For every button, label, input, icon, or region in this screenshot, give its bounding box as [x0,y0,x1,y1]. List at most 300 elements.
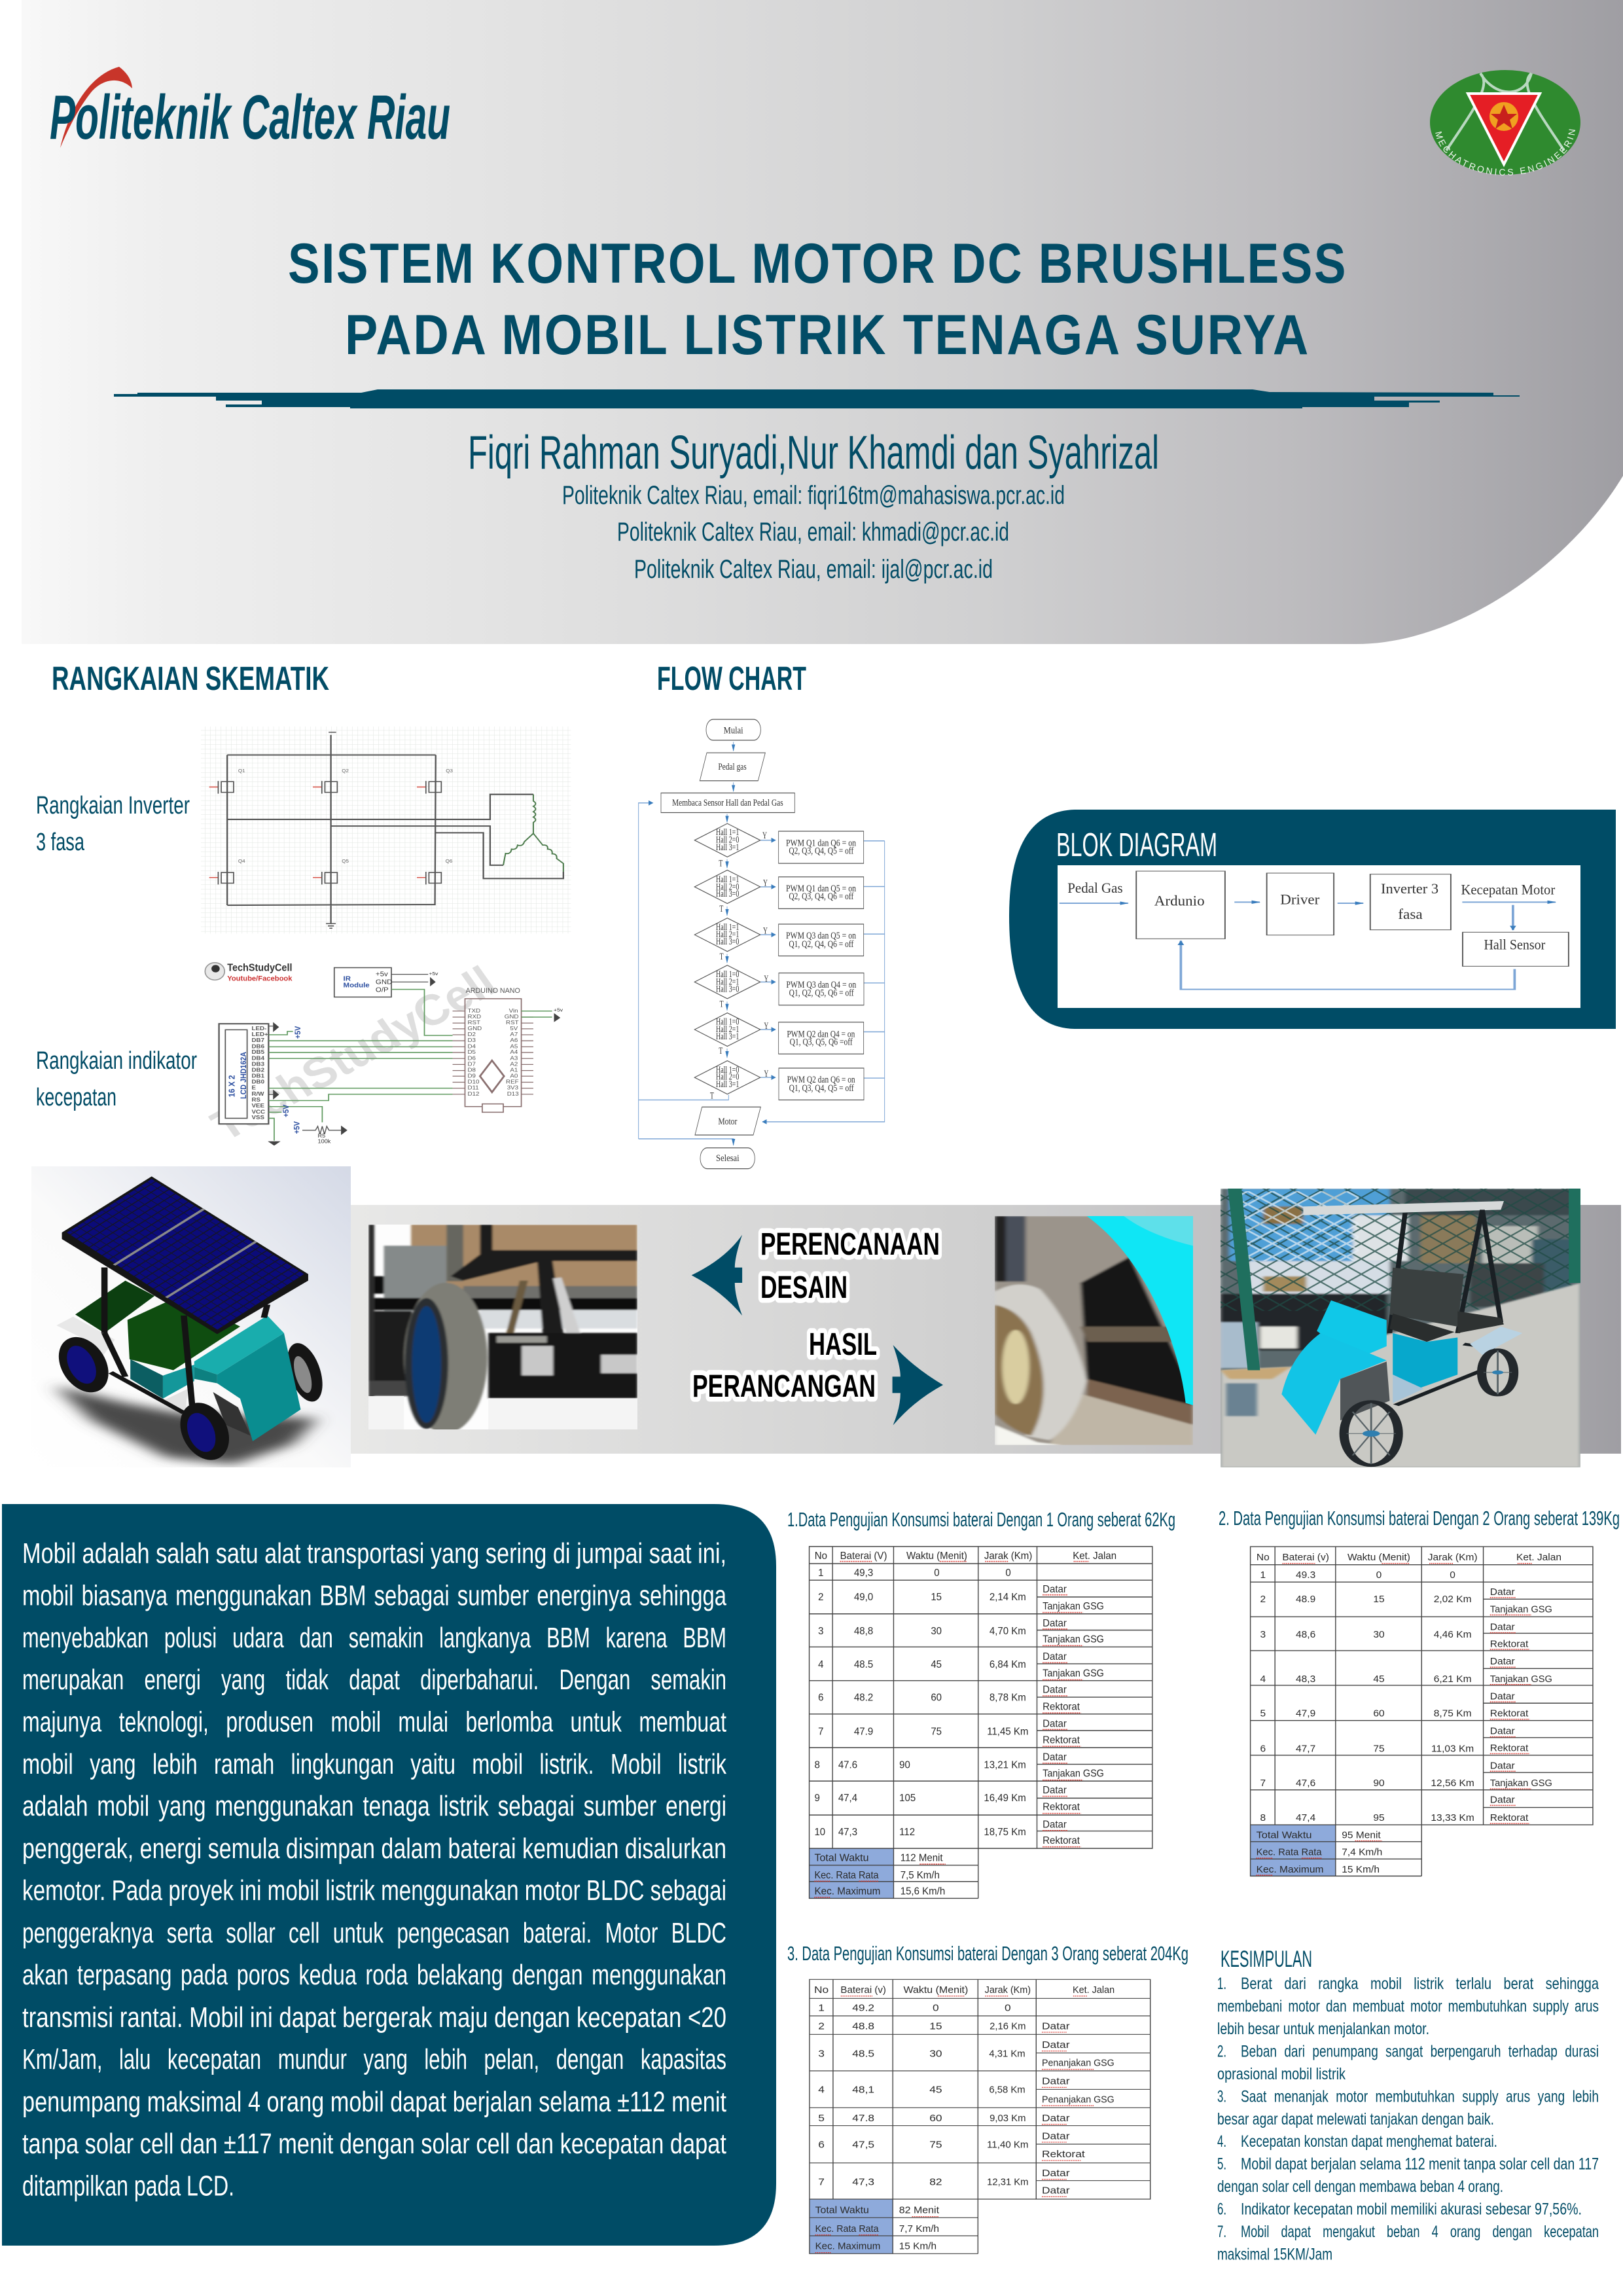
chart: speed indicator schematic: +5V [293,1121,302,1134]
author affiliations: Politeknik Caltex Riau, email: khmadi@pcr.ac.id [617,518,1009,547]
branch labels: T [719,1045,723,1056]
chart: speed indicator schematic: 5V [510,1025,518,1031]
label: rangkaian indikator kecepatan: kecepatan [36,1084,116,1111]
chart: speed indicator schematic: D4 [468,1043,476,1049]
table 3: 3 person battery test: 15 [929,2021,942,2032]
chart: inverter 3 phase schematic: Q2 [342,768,349,774]
decisions: Hall 2=0 [716,834,739,845]
table 1: 1 person battery test: 47,3 [838,1827,857,1838]
text: introduction paragraph: adalah mobil yang menggunakan tenaga listrik sebagai sumber energi [22,1790,726,1822]
table 1: 1 person battery test: Datar [1043,1618,1067,1629]
text: conclusions list: 6. [1217,2200,1226,2219]
PWM process boxes: PWM Q1 dan Q5 = on [786,883,856,893]
table 1: 1 person battery test: Datar [1043,1684,1067,1696]
table 3: 3 person battery test: 15 Km/h [899,2241,936,2251]
branch labels: T [720,951,724,961]
heading: blok diagram: BLOK DIAGRAM [1056,826,1217,863]
authors: Fiqri Rahman Suryadi,Nur Khamdi dan Syahrizal [468,427,1159,479]
author affiliations [562,481,1065,584]
text: conclusions list: besar agar dapat melewati tanjakan dengan baik. [1217,2110,1494,2128]
table 1: 1 person battery test: 112 Menit [901,1853,943,1864]
table 1: 1 person battery test: Kec. Rata Rata [814,1870,879,1881]
table 3: 3 person battery test: 45 [929,2085,942,2095]
chart: speed indicator schematic [202,957,563,1150]
table 1: 1 person battery test: 3 [818,1626,824,1637]
table 2: 2 person battery test: Kec. Rata Rata [1257,1847,1322,1857]
table 2: 2 person battery test: 12,56 Km [1431,1778,1474,1789]
branch labels: Y [763,925,768,936]
table 3: 3 person battery test: Baterai (v) [840,1984,886,1996]
decisions: Hall 3=0 [716,984,739,994]
table 2: 2 person battery test: 4,46 Km [1434,1629,1472,1640]
table 1: 1 person battery test: 112 [899,1827,915,1838]
table 3: 3 person battery test: 48,1 [852,2085,874,2095]
table 2: 2 person battery test: Baterai (v) [1282,1552,1329,1563]
table 1: 1 person battery test: 30 [931,1626,942,1637]
chart: speed indicator schematic: DB5 [252,1049,264,1055]
chart: speed indicator schematic: +5v [429,971,438,977]
table 1: 1 person battery test: 48,8 [854,1626,873,1637]
PWM process boxes: Q2, Q3, Q4, Q5 = off [789,846,854,856]
label: hasil perancangan: HASIL [809,1327,877,1362]
table 1: 1 person battery test: 47,4 [838,1793,858,1804]
chart: speed indicator schematic: DB3 [252,1061,264,1067]
table 3: 3 person battery test: Kec. Maximum [815,2241,880,2251]
table 2: 2 person battery test [1251,1547,1593,1876]
chart: speed indicator schematic: TechStudyCell [227,962,292,973]
decisions: Hall 2=1 [716,976,739,987]
table 3: 3 person battery test: 47,5 [852,2140,874,2150]
table 2: 2 person battery test: Rektorat [1490,1639,1529,1649]
table 2: 2 person battery test: 7,4 Km/h [1342,1847,1382,1857]
PWM process boxes: PWM Q3 dan Q5 = on [786,930,856,941]
text: conclusions list: 7. [1217,2223,1226,2241]
heading: table 1: 1.Data Pengujian Konsumsi baterai Dengan 1 Orang seberat 62Kg [787,1508,1175,1531]
table 1: 1 person battery test: 49,3 [854,1568,873,1579]
table 3: 3 person battery test: 48.5 [852,2049,874,2059]
input: pedal gas [700,753,765,781]
decisions: Hall 2=1 [716,1024,739,1034]
table 3: 3 person battery test: Datar [1042,2076,1070,2087]
table 1: 1 person battery test: Rektorat [1043,1835,1080,1846]
table 2: 2 person battery test: Tanjakan GSG [1490,1778,1552,1789]
table 3: 3 person battery test: Waktu (Menit) [903,1984,968,1996]
table 3: 3 person battery test: Datar [1042,2131,1070,2142]
table 3: 3 person battery test: Jarak (Km) [985,1984,1031,1996]
chart: speed indicator schematic: A0 [510,1073,518,1079]
table 1: 1 person battery test: Datar [1043,1584,1067,1595]
table 2: 2 person battery test: Rektorat [1490,1812,1529,1823]
branch labels [710,830,768,1101]
table 3: 3 person battery test: 47,3 [852,2177,874,2187]
branch labels: T [720,999,724,1009]
decisions: Hall 3=1 [716,842,739,852]
table 2: 2 person battery test: 48.9 [1296,1594,1315,1605]
table 3: 3 person battery test: 1 [818,2003,825,2013]
text: introduction paragraph: akan terpasang pada poros kedua roda belakang dengan menggunakan [22,1959,726,1991]
table 2: 2 person battery test: 95 Menit [1342,1830,1381,1841]
table 1: 1 person battery test: 4 [818,1659,824,1670]
table 2: 2 person battery test: 0 [1450,1570,1455,1581]
table 3: 3 person battery test: Datar [1042,2039,1070,2051]
chart: inverter 3 phase schematic: Q1 [238,768,245,774]
table 2: 2 person battery test: 7 [1260,1778,1266,1789]
table 1: 1 person battery test: Rektorat [1043,1701,1080,1712]
table 3: 3 person battery test: 6,58 Km [989,2085,1026,2095]
table 1: 1 person battery test: Tanjakan GSG [1043,1768,1104,1780]
table 1: 1 person battery test: 6,84 Km [990,1659,1026,1670]
PWM process boxes: PWM Q3 dan Q4 = on [786,979,856,990]
author affiliations: Politeknik Caltex Riau, email: fiqri16tm@mahasiswa.pcr.ac.id [562,481,1065,510]
table 3: 3 person battery test: Datar [1042,2113,1070,2124]
table 2: 2 person battery test: 45 [1373,1674,1385,1685]
table 2: 2 person battery test: Tanjakan GSG [1490,1604,1552,1615]
table 1: 1 person battery test: 49,0 [854,1592,873,1603]
table 2: 2 person battery test: 6 [1260,1744,1266,1755]
label: rangkaian inverter: 3 fasa [36,829,85,856]
start terminal: Mulai [724,725,743,736]
table 3: 3 person battery test: 82 [929,2177,942,2187]
table 1: 1 person battery test: 47.6 [838,1759,857,1770]
decisions: Hall 2=0 [716,1071,739,1082]
chart: speed indicator schematic: LCD JHD162A [240,1052,248,1099]
chart: inverter 3 phase schematic: Q6 [446,859,452,864]
branch labels: T [719,858,723,869]
chart: speed indicator schematic: A7 [510,1031,518,1037]
text: introduction paragraph: penggerak, energi semula disimpan dalam baterai kemudian disalurkan [22,1833,726,1865]
chart: speed indicator schematic: D9 [468,1073,476,1079]
title divider bar [114,389,1520,408]
chart: block diagram [1060,871,1569,990]
table 3: 3 person battery test: Penanjakan GSG [1042,2058,1115,2068]
chart: speed indicator schematic: VEE [252,1103,264,1109]
table 3: 3 person battery test: Datar [1042,2185,1070,2196]
table 3: 3 person battery test: Rektorat [1042,2149,1085,2160]
table 3: 3 person battery test: 7 [818,2177,825,2187]
table 3: 3 person battery test: 3 [818,2049,825,2059]
table 1: 1 person battery test: 0 [1005,1568,1011,1579]
chart: block diagram: Inverter 3 [1381,881,1438,897]
branch labels: Y [763,878,768,888]
text: introduction paragraph: majunya teknologi, produsen mobil mulai berlomba untuk membuat [22,1706,726,1738]
table 2: 2 person battery test: 1 [1260,1570,1266,1581]
table 1: 1 person battery test: Datar [1043,1785,1067,1796]
PWM process boxes: PWM Q2 dan Q4 = on [787,1028,855,1039]
table 1: 1 person battery test: Tanjakan GSG [1043,1634,1104,1645]
decisions [694,823,760,1094]
end terminal [700,1148,755,1169]
table 1: 1 person battery test: 4,70 Km [990,1626,1026,1637]
chart: block diagram: Hall Sensor [1484,937,1545,953]
table 3: 3 person battery test: 6 [818,2140,825,2150]
chart: speed indicator schematic: IR [344,975,351,982]
table 3: 3 person battery test: Datar [1042,2021,1070,2032]
table 3: 3 person battery test: Kec. Rata Rata [815,2223,879,2234]
table 2: 2 person battery test: 2,02 Km [1434,1594,1472,1605]
PWM process boxes: Q1, Q3, Q5, Q6 =off [790,1037,853,1047]
table 3: 3 person battery test: 60 [929,2113,942,2124]
label: perencanaan desain: DESAIN [760,1270,847,1305]
table 3: 3 person battery test: 0 [1005,2003,1011,2013]
logo: Politeknik Caltex Riau: Politeknik Caltex Riau [50,82,450,152]
text: introduction paragraph: transmisi rantai. Mobil ini dapat bergerak maju dengan kecepatan <20 [22,2001,726,2034]
header background panel [22,0,1623,644]
chart: speed indicator schematic: RST [506,1020,519,1026]
chart: speed indicator schematic: +5V [294,1026,302,1039]
decisions: Hall 1=0 [716,1016,739,1027]
table 1: 1 person battery test: 90 [899,1759,910,1770]
chart: speed indicator schematic: A3 [510,1055,518,1061]
text: conclusions list: lebih besar untuk menjalankan motor. [1217,2020,1429,2038]
table 2: 2 person battery test: 75 [1373,1744,1385,1755]
table 3: 3 person battery test: Ket. Jalan [1073,1984,1115,1996]
decisions: Hall 3=0 [716,936,739,946]
table 2: 2 person battery test: 90 [1373,1778,1385,1789]
chart: speed indicator schematic: DB4 [252,1055,265,1061]
table 2: 2 person battery test: Kec. Maximum [1257,1864,1323,1875]
table 3: 3 person battery test: Total Waktu [815,2205,869,2215]
table 2: 2 person battery test: 47,4 [1296,1812,1316,1823]
decisions: Hall 1=0 [716,1064,739,1075]
table 2: 2 person battery test: Ket. Jalan [1516,1552,1561,1563]
table 2: 2 person battery test: 49.3 [1296,1570,1315,1581]
table 2: 2 person battery test: 95 [1373,1812,1385,1823]
heading: rangkaian skematik: RANGKAIAN SKEMATIK [52,660,329,697]
panel: blok diagram [1009,810,1616,1029]
PWM process boxes [779,831,864,1100]
chart: flow chart [639,719,885,1169]
branch labels: T [719,903,724,914]
table 1: 1 person battery test: Datar [1043,1819,1067,1830]
chart: speed indicator schematic: E [252,1085,256,1091]
text: introduction paragraph: mobil yang lebih ramah lingkungan yaitu mobil listrik. Mobil listrik [22,1748,727,1780]
chart: speed indicator schematic: 16 X 2 [227,1075,237,1097]
chart: speed indicator schematic: LED- [252,1025,266,1031]
table 2: 2 person battery test: Tanjakan GSG [1490,1674,1552,1685]
table 1: 1 person battery test: 48.5 [854,1659,873,1670]
table 1: 1 person battery test: 47.9 [854,1726,873,1738]
text: introduction paragraph: penumpang maksimal 4 orang mobil dapat berjalan selama ±112 menit [22,2086,726,2118]
decisions: Hall 1=1 [716,827,739,837]
text: conclusions list: 2. [1217,2042,1226,2060]
table 1: 1 person battery test: 15,6 Km/h [901,1886,945,1897]
table 2: 2 person battery test: 13,33 Km [1431,1812,1474,1823]
image: chassis rear wheel photo [368,1225,637,1429]
label: perencanaan desain: PERENCANAAN [760,1227,940,1262]
chart: speed indicator schematic: DB0 [252,1079,264,1085]
label: rangkaian indikator kecepatan: Rangkaian indikator [36,1047,197,1075]
image: CAD model of solar car [31,1166,351,1467]
icon: mechatronics engineering emblem [1430,70,1580,175]
text: conclusions list: oprasional mobil listrik [1217,2065,1346,2083]
table 2: 2 person battery test: 47,6 [1296,1778,1315,1789]
table 1: 1 person battery test: 0 [934,1568,940,1579]
process: baca sensor: Membaca Sensor Hall dan Pedal Gas [672,797,783,808]
chart: speed indicator schematic: R5 [318,1133,325,1139]
text: introduction paragraph: mobil biasanya menggunakan BBM sebagai sumber energinya sehingga [22,1580,726,1611]
label: rangkaian indikator kecepatan [36,1047,197,1111]
heading: kesimpulan: KESIMPULAN [1221,1946,1312,1972]
label: hasil perancangan: PERANCANGAN [692,1369,876,1404]
table 2: 2 person battery test: 47,7 [1296,1744,1315,1755]
table 1: 1 person battery test: 8,78 Km [990,1692,1026,1703]
chart: speed indicator schematic: DB1 [252,1073,264,1079]
table 2: 2 person battery test: Rektorat [1490,1743,1529,1753]
branch labels: Y [764,1020,768,1031]
chart: inverter 3 phase schematic: Q3 [446,768,453,774]
label: hasil perancangan [692,1327,877,1404]
process: baca sensor [661,793,794,813]
chart: speed indicator schematic: +5v [376,971,388,978]
table 2: 2 person battery test: Waktu (Menit) [1347,1552,1410,1563]
icon: right arrow [893,1345,943,1426]
table 1: 1 person battery test: 8 [814,1759,820,1770]
text: conclusions list: dengan solar cell dengan membawa beban 4 orang. [1217,2178,1503,2196]
chart: speed indicator schematic: D7 [468,1061,476,1067]
table 2: 2 person battery test: Datar [1490,1656,1515,1667]
chart: speed indicator schematic: D10 [468,1079,479,1085]
title: SISTEM KONTROL MOTOR DC BRUSHLESS [288,232,1347,295]
table 1: 1 person battery test: 75 [931,1726,942,1738]
table 2: 2 person battery test: Rektorat [1490,1708,1529,1719]
table 2: 2 person battery test: Datar [1490,1760,1515,1771]
chart: speed indicator schematic: REF [506,1079,519,1085]
text: conclusions list: 3. [1217,2087,1226,2106]
chart: speed indicator schematic: A6 [510,1037,518,1043]
table 3: 3 person battery test: 49.2 [852,2003,874,2013]
panel: grey photo band [351,1205,1621,1454]
decisions: Hall 1=1 [716,922,739,932]
chart: speed indicator schematic: GND [468,1025,482,1031]
chart: block diagram: fasa [1398,906,1423,922]
chart: speed indicator schematic: A1 [510,1067,518,1073]
chart: speed indicator schematic: RST [468,1020,480,1026]
chart: speed indicator schematic: Module [344,982,370,989]
flow connectors [639,742,885,1145]
chart: speed indicator schematic: 3V3 [507,1085,518,1091]
branch labels: Y [764,973,768,984]
chart: speed indicator schematic: ARDUINO NANO [466,988,520,995]
chart: speed indicator schematic: Vin [509,1007,518,1014]
label: perencanaan desain [760,1227,940,1305]
PWM process boxes: Q1, Q3, Q4, Q5 = off [789,1083,855,1093]
chart: speed indicator schematic: D2 [468,1031,476,1037]
chart: speed indicator schematic: R/W [252,1090,264,1097]
text: conclusions list: 1. [1217,1975,1226,1993]
decisions: Hall 2=1 [716,929,739,940]
table 2: 2 person battery test: Datar [1490,1622,1515,1633]
table 2: 2 person battery test: Datar [1490,1691,1515,1702]
chart: speed indicator schematic: GND [376,978,393,986]
table 1: 1 person battery test: 105 [899,1793,916,1804]
table 1: 1 person battery test: Kec. Maximum [814,1886,880,1897]
chart: speed indicator schematic: RXD [468,1013,481,1020]
table 1: 1 person battery test: Datar [1043,1651,1067,1662]
table 2: 2 person battery test: Datar [1490,1587,1515,1598]
table 2: 2 person battery test: 5 [1260,1708,1266,1719]
table 3: 3 person battery test: 30 [929,2049,942,2059]
chart: speed indicator schematic: D12 [468,1090,479,1097]
watermark: TechStudyCell [202,957,505,1150]
branch labels: Y [762,830,767,840]
table 2: 2 person battery test: Datar [1490,1795,1515,1805]
chart: speed indicator schematic: D8 [468,1067,476,1073]
text: introduction paragraph: penggeraknya serta sollar cell untuk pengecasan baterai. Motor BLDC [22,1917,726,1949]
decisions: Hall 3=1 [716,1079,739,1089]
table 3: 3 person battery test: 12,31 Km [987,2177,1028,2187]
table 1: 1 person battery test: 45 [931,1659,942,1670]
table 1: 1 person battery test: Datar [1043,1751,1067,1763]
chart: block diagram: Pedal Gas [1067,880,1123,896]
output: motor: Motor [718,1116,737,1126]
chart: inverter 3 phase schematic [201,726,571,933]
table 1: 1 person battery test: 1 [818,1568,824,1579]
panel: introduction [2,1504,776,2246]
text: conclusions list: 5. [1217,2155,1226,2174]
heading: flow chart: FLOW CHART [657,660,806,697]
text: conclusions list: maksimal 15KM/Jam [1217,2245,1332,2263]
table 2: 2 person battery test: 8,75 Km [1434,1708,1472,1719]
chart: inverter 3 phase schematic: Q5 [342,859,349,864]
table 1: 1 person battery test: Tanjakan GSG [1043,1668,1104,1679]
table 2: 2 person battery test: 30 [1373,1629,1385,1640]
table 2: 2 person battery test: Total Waktu [1257,1830,1312,1841]
table 2: 2 person battery test: Jarak (Km) [1428,1552,1478,1563]
text: introduction paragraph: merupakan energi yang tidak dapat diperbaharui. Dengan semakin [22,1664,726,1696]
table 1: 1 person battery test: Jarak (Km) [984,1551,1032,1562]
chart: block diagram: Driver [1280,892,1319,908]
table 1: 1 person battery test: 18,75 Km [984,1827,1026,1838]
chart: speed indicator schematic: D3 [468,1037,476,1043]
table 3: 3 person battery test: 5 [818,2113,825,2124]
title: PADA MOBIL LISTRIK TENAGA SURYA [345,304,1310,367]
table 3: 3 person battery test: Datar [1042,2168,1070,2179]
table 1: 1 person battery test: 60 [931,1692,942,1703]
chart: speed indicator schematic: 100k [318,1138,331,1144]
author affiliations: Politeknik Caltex Riau, email: ijal@pcr.ac.id [634,555,993,584]
chart: speed indicator schematic: D13 [507,1090,519,1097]
table 3: 3 person battery test: 75 [929,2140,942,2150]
table 1: 1 person battery test: 9 [814,1793,820,1804]
label: rangkaian inverter [36,792,190,856]
title [288,232,1347,367]
PWM process boxes: Q1, Q2, Q4, Q6 = off [789,939,854,949]
table 2: 2 person battery test: 47,9 [1296,1708,1315,1719]
table 1: 1 person battery test: Tanjakan GSG [1043,1601,1104,1612]
chart: speed indicator schematic: DB2 [252,1067,264,1073]
branch labels: Y [764,1068,768,1079]
text: conclusions list [1217,1975,1599,2263]
table 1: 1 person battery test: Rektorat [1043,1734,1080,1746]
table 3: 3 person battery test: 2 [818,2021,825,2032]
table 1: 1 person battery test: 48.2 [854,1692,873,1703]
table 1: 1 person battery test: No [815,1551,827,1562]
end terminal: Selesai [716,1153,740,1163]
text: introduction paragraph: Mobil adalah salah satu alat transportasi yang sering di jumpai saat ini, [22,1537,726,1570]
input: pedal gas: Pedal gas [718,761,747,772]
table 1: 1 person battery test: 15 [931,1592,942,1603]
decisions: Hall 1=1 [716,874,739,885]
table 3: 3 person battery test: 7,7 Km/h [899,2223,939,2234]
decisions: Hall 1=0 [716,969,739,979]
chart: speed indicator schematic: D6 [468,1055,476,1061]
icon: left arrow [692,1235,742,1316]
table 1: 1 person battery test: 2,14 Km [990,1592,1026,1603]
chart: speed indicator schematic: D11 [468,1085,479,1091]
table 3: 3 person battery test: 9,03 Km [990,2113,1026,2124]
table 2: 2 person battery test: 8 [1260,1812,1266,1823]
start terminal [706,719,760,740]
